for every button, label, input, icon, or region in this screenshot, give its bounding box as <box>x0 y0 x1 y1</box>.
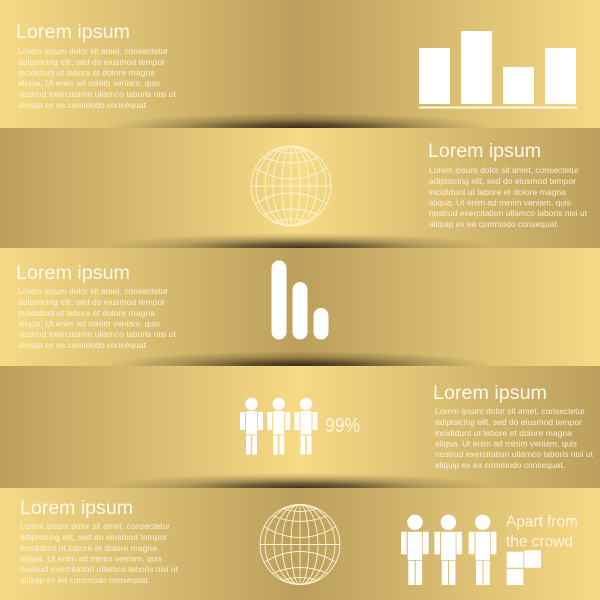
text block: band 4: aliquip ex ea commodo consequat. <box>435 460 565 470</box>
text block: band 5: incididunt ut labore et dolore magna <box>20 543 157 553</box>
text block: band 2: nostrud exercitation ullamco laboris nisi ut <box>429 208 588 218</box>
icon: three people <box>240 398 318 454</box>
text block: band 2: aliquip ex ea commodo consequat. <box>429 219 559 229</box>
icon: wireframe globe <box>251 146 331 226</box>
text block: band 1 <box>18 46 177 110</box>
text block: band 3: Lorem ipsum dolor sit amet, consectetur <box>18 286 168 296</box>
text block: band 3 <box>18 286 177 350</box>
text block: band 1: aliqua. Ut enim ad minim veniam, quis <box>18 78 161 88</box>
panel: band 4 <box>0 366 600 488</box>
text block: band 1: aliquip ex ea commodo consequat. <box>18 100 148 110</box>
text block: band 5: Lorem ipsum dolor sit amet, consectetur <box>20 521 170 531</box>
text block: band 1: nostrud exercitation ullamco laboris nisi ut <box>18 89 177 99</box>
heading: band 3: Lorem ipsum <box>16 263 130 284</box>
text block: band 3: nostrud exercitation ullamco laboris nisi ut <box>18 329 177 339</box>
icon: rounded bars <box>272 260 328 340</box>
caption: apart from the crowd <box>506 514 578 551</box>
text block: band 4: incididunt ut labore et dolore magna <box>435 428 572 438</box>
text block: band 2: aliqua. Ut enim ad minim veniam, quis <box>429 198 572 208</box>
heading: band 4: Lorem ipsum <box>433 383 547 404</box>
text block: band 4: adipisicing elit, sed do eiusmod tempor <box>435 417 582 427</box>
caption: apart from the crowd: Apart from <box>506 514 578 531</box>
text block: band 1: adipisicing elit, sed do eiusmod tempor <box>18 57 165 67</box>
icon: wireframe globe <box>260 504 340 584</box>
text block: band 2 <box>429 165 588 229</box>
text block: band 2: adipisicing elit, sed do eiusmod tempor <box>429 176 576 186</box>
text block: band 5: adipisicing elit, sed do eiusmod tempor <box>20 532 167 542</box>
icon: three large people <box>401 515 496 585</box>
panel: band 5 <box>0 488 600 600</box>
caption: apart from the crowd: the crowd <box>506 534 573 551</box>
text block: band 4: aliqua. Ut enim ad minim veniam, quis <box>435 438 578 448</box>
text block: band 4 <box>435 406 594 470</box>
text block: band 4: Lorem ipsum dolor sit amet, consectetur <box>435 406 585 416</box>
heading: band 1: Lorem ipsum <box>16 22 130 43</box>
panel: band 2 <box>0 128 600 248</box>
text block: band 3: aliquip ex ea commodo consequat. <box>18 340 148 350</box>
bar chart: four white bars <box>419 31 577 108</box>
text block: band 2: incididunt ut labore et dolore magna <box>429 187 566 197</box>
text block: band 1: incididunt ut labore et dolore magna <box>18 68 155 78</box>
icon: three squares <box>507 550 541 585</box>
text block: band 5 <box>20 521 179 585</box>
label: 99%: 99% <box>325 415 360 437</box>
text block: band 3: aliqua. Ut enim ad minim veniam, quis <box>18 318 161 328</box>
text block: band 5: nostrud exercitation ullamco laboris nisi ut <box>20 564 179 574</box>
text block: band 3: incididunt ut labore et dolore magna <box>18 308 155 318</box>
text block: band 1: Lorem ipsum dolor sit amet, consectetur <box>18 46 168 56</box>
panel: band 3 <box>0 248 600 366</box>
text block: band 5: aliquip ex ea commodo consequat. <box>20 575 150 585</box>
heading: band 2: Lorem ipsum <box>428 141 541 162</box>
text block: band 3: adipisicing elit, sed do eiusmod tempor <box>18 297 165 307</box>
panel: band 1 <box>0 0 600 128</box>
heading: band 5: Lorem ipsum <box>20 498 133 519</box>
text block: band 2: Lorem ipsum dolor sit amet, consectetur <box>429 165 579 175</box>
text block: band 5: aliqua. Ut enim ad minim veniam, quis <box>20 554 163 564</box>
text block: band 4: nostrud exercitation ullamco laboris nisi ut <box>435 449 594 459</box>
